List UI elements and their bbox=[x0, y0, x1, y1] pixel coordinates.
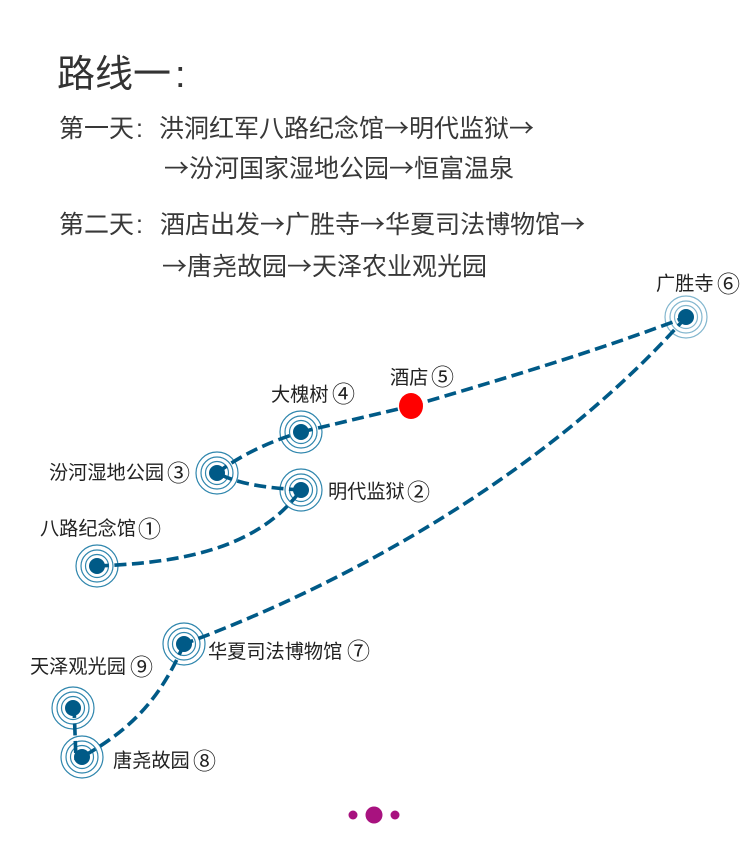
marker: hotel stop 5 bbox=[399, 393, 423, 419]
itinerary: day two: 第二天: bbox=[59, 211, 143, 239]
marker: stop 1 bbox=[76, 545, 118, 587]
itinerary: day one: 洪洞红军八路纪念馆→明代监狱→ bbox=[159, 109, 534, 145]
label: stop 9: ⑨ bbox=[130, 654, 153, 680]
marker: stop 3 bbox=[196, 452, 238, 494]
marker: stop 9 bbox=[52, 687, 94, 729]
marker: stop 4 bbox=[280, 411, 322, 453]
itinerary: day one: →汾河国家湿地公园→恒富温泉 bbox=[164, 149, 514, 185]
marker: stop 6 bbox=[665, 296, 707, 338]
label: stop 8: 唐尧故园 bbox=[113, 750, 190, 772]
itinerary: day two: 酒店出发→广胜寺→华夏司法博物馆→ bbox=[160, 205, 585, 241]
label: stop 6: ⑥ bbox=[717, 271, 740, 297]
pagination dots bbox=[348, 806, 400, 824]
route: stops 7 to 8 bbox=[82, 644, 184, 757]
label: stop 3: ③ bbox=[167, 460, 190, 486]
route: stops 3 to 4 bbox=[217, 432, 301, 473]
label: stop 4: ④ bbox=[332, 381, 355, 407]
label: stop 3: 汾河湿地公园 bbox=[49, 462, 164, 484]
route: stops 8 to 9 bbox=[74, 706, 76, 760]
route map bbox=[30, 271, 740, 778]
itinerary: day two: →唐尧故园→天泽农业观光园 bbox=[162, 247, 487, 283]
label: stop 2: ② bbox=[407, 479, 430, 505]
route: stops 1 to 2 bbox=[97, 490, 301, 566]
marker: stop 2 bbox=[280, 469, 322, 511]
label: stop 4: 大槐树 bbox=[271, 384, 329, 406]
label: stop 6 bbox=[656, 271, 740, 297]
label: stop 4 bbox=[271, 381, 355, 407]
route: stops 2 to 3 bbox=[217, 473, 301, 490]
label: stop 5: 酒店 bbox=[390, 367, 428, 389]
marker: stop 7 bbox=[163, 623, 205, 665]
label: stop 9 bbox=[30, 654, 153, 680]
route: stops 5 to 6 bbox=[411, 317, 686, 406]
label: stop 7 bbox=[208, 638, 370, 664]
label: stop 2: 明代监狱 bbox=[328, 481, 405, 503]
label: stop 1 bbox=[40, 516, 161, 542]
route: stops 6 to 7 bbox=[184, 317, 686, 644]
label: stop 7: 华夏司法博物馆 bbox=[208, 641, 342, 663]
label: stop 7: ⑦ bbox=[347, 638, 370, 664]
label: stop 9: 天泽观光园 bbox=[30, 656, 126, 678]
label: stop 8: ⑧ bbox=[193, 748, 216, 774]
label: stop 5: ⑤ bbox=[431, 364, 454, 390]
itinerary: day one: 第一天: bbox=[59, 115, 143, 143]
title: 路线一: bbox=[57, 54, 186, 96]
route: stops 4 to 5 bbox=[301, 406, 411, 432]
label: stop 2 bbox=[328, 479, 430, 505]
marker: stop 8 bbox=[61, 736, 103, 778]
label: stop 1: 八路纪念馆 bbox=[40, 517, 136, 540]
label: stop 8 bbox=[113, 748, 216, 774]
label: stop 1: ① bbox=[138, 516, 161, 542]
label: stop 3 bbox=[49, 460, 190, 486]
label: stop 6: 广胜寺 bbox=[656, 273, 714, 295]
itinerary: day two bbox=[59, 205, 585, 283]
itinerary: day one bbox=[59, 109, 534, 185]
label: stop 5 bbox=[390, 364, 454, 390]
